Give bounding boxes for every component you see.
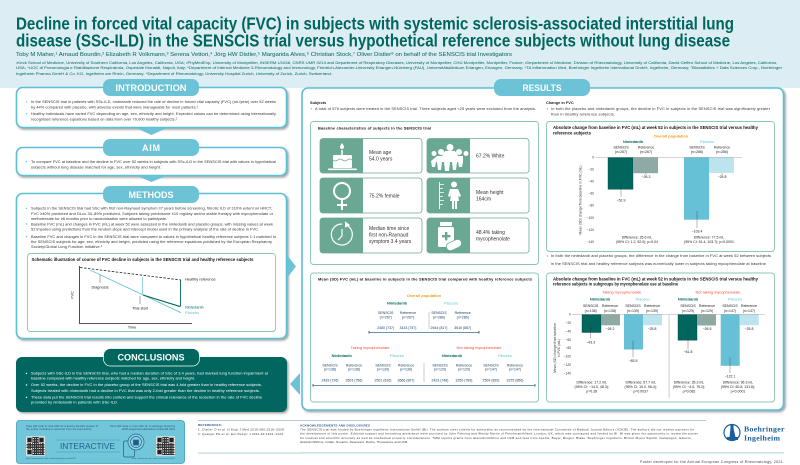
- bar chart: mycophenolate subgroups: Not taking mycophenolate: [696, 290, 740, 294]
- mycophenolate subgroup table: SENSCIS: [375, 363, 391, 367]
- bar chart: mycophenolate subgroups: p<0.0001: [731, 390, 745, 394]
- introduction text: In the SENSCIS trial in patients with SSc-ILD, nintedanib reduced the rate of decline in forced vital capacity (FVC) (mL/year) over 52 weeks: [31, 99, 276, 104]
- bar chart: mycophenolate subgroups: (95% CI: 19.0, 96.4);: [625, 385, 657, 389]
- mean FVC table panel: [310, 273, 538, 402]
- card: median time: [320, 218, 422, 253]
- panel: aim: [16, 139, 286, 176]
- bar chart: mycophenolate subgroups: SENSCIS: [680, 304, 696, 308]
- icon: cake: [328, 143, 357, 170]
- mycophenolate subgroup table: Taking mycophenolate: [351, 345, 389, 350]
- bar chart: mycophenolate subgroups: (95% CI: 60.8, 131.8);: [721, 385, 755, 389]
- results heading: [494, 79, 590, 96]
- methods text: Baseline FVC (mL) and changes in FVC (mL) at week 52 were assessed in the nintedanib and placebo groups, with missing values at week: [31, 221, 273, 226]
- schematic illustration: Placebo: [185, 310, 199, 315]
- bar chart: overall population: Mean (SD) change from baseline in FVC (mL): [578, 166, 582, 234]
- subjects text: Subjects: [310, 100, 326, 105]
- overall population table: Placebo: [444, 300, 458, 305]
- bar chart: mycophenolate subgroups: Reference: [644, 304, 660, 308]
- panel: introduction: [16, 79, 286, 128]
- aim text: [26, 159, 276, 169]
- methods text: Subjects in the SENSCIS trial had SSc with first non-Raynaud symptom ≤7 years before screening, fibrotic ILD of ≥10% extent on HRCT,: [31, 206, 272, 211]
- overall population table: Reference: [400, 311, 416, 315]
- bar chart: mycophenolate subgroups: (n=147): [724, 309, 736, 313]
- bar chart: mycophenolate subgroups: −25.8: [648, 327, 656, 331]
- mycophenolate subgroup table: SENSCIS: [483, 363, 499, 367]
- bar chart: overall population: −20: [588, 168, 594, 172]
- icon: clock: [331, 222, 352, 245]
- icon: female symbol: [334, 183, 350, 210]
- bar chart: overall population: reference subjects: [553, 130, 592, 135]
- subjects text: A total of 576 subjects were treated in the SENSCIS trial. Three subjects aged <25 years were excluded from the analysis.: [315, 106, 536, 111]
- bar chart: overall population: (95% CI: 1.2, 52.0); p=0.04: [616, 240, 658, 244]
- conclusions text: Over 52 weeks, the decline in FVC in the placebo group of the SENSCIS trial was 4-fold greater than in healthy reference subjects.: [31, 382, 262, 387]
- conclusions text: [26, 371, 269, 405]
- mycophenolate subgroup table: SENSCIS: [322, 363, 338, 367]
- bar chart: mycophenolate subgroups: −60: [565, 338, 571, 342]
- mycophenolate subgroup table: Reference: [398, 363, 414, 367]
- affiliations: ¹Keck School of Medicine, University of Southern California, Los Angeles, California, USA; ²PhyMedExp, University of Montpellier, INSERM U1046, CNRS UMR 9214 and Department of Respiratory Diseases, University of Montpellier, CHU Montpellier, Montpellier, France; ³Department of Medicine, Division of Rheumatology, University of California, David Geffen School of Medicine, Los Angeles, California,: [16, 61, 777, 65]
- mycophenolate subgroup table: (n=129): [434, 368, 446, 372]
- mycophenolate subgroup table: 3666 (897): [398, 378, 414, 382]
- card: mean height: [427, 178, 529, 213]
- mycophenolate subgroup table: 2509 (820): [483, 378, 499, 382]
- mycophenolate subgroup table: 3250 (789): [456, 378, 472, 382]
- icon: QR code right: [156, 436, 175, 456]
- mycophenolate subgroup table: Reference: [507, 363, 523, 367]
- bar chart: mycophenolate subgroups: Difference: 17.2 mL: [576, 380, 607, 384]
- schematic illustration: Trial start: [132, 306, 149, 310]
- acknowledgements and disclosures: GlaxoSmithKline, Indalo, Novartis, Respivant, Roche, Theravance and UCB.: [300, 440, 408, 444]
- bar chart: mycophenolate subgroups: (n=138): [604, 309, 616, 313]
- card: mean height: Mean height: [476, 190, 504, 196]
- subgroup text: In both the nintedanib and placebo groups, the difference in the change from baseline in FVC at week 52 between subjects: [551, 253, 771, 258]
- schematic illustration: Schematic illustration of course of FVC decline in subjects in the SENSCIS trial and healthy reference subjects: [32, 257, 254, 262]
- bar chart: mycophenolate subgroups: Taking mycophenolate: [602, 290, 641, 294]
- mycophenolate subgroup table: (n=147): [509, 368, 521, 372]
- bar chart: mycophenolate subgroups: −43.3: [586, 340, 595, 344]
- overall population table: SENSCIS: [378, 311, 394, 315]
- interactive box: [16, 420, 184, 464]
- bar chart: mycophenolate subgroups: −40: [565, 329, 571, 333]
- mycophenolate subgroup table: Reference: [456, 363, 472, 367]
- aim text: subjects without lung disease matched for age, sex, ethnicity and height.: [31, 164, 161, 169]
- bar chart: overall population: −40: [588, 180, 594, 184]
- card: white: 67.2% White: [476, 154, 505, 160]
- bar chart: mycophenolate subgroups: p=0.0037: [633, 390, 648, 394]
- bar chart: overall population: −25.8: [718, 175, 726, 179]
- bar chart: overall population: [546, 122, 774, 252]
- schematic illustration: Nintedanib: [185, 304, 204, 310]
- bar chart: overall population: −120: [587, 228, 594, 232]
- aim heading: [103, 139, 199, 156]
- methods text: Society/Global Lung Function Initiative.³: [31, 244, 103, 249]
- subjects text: [310, 100, 536, 111]
- bar chart: overall population: Reference: [714, 146, 730, 150]
- mean FVC table panel: Mean (SD) FVC (mL) at baseline in subjects in the SENSCIS trial compared with healthy reference subjects: [318, 276, 532, 282]
- bar chart: mycophenolate subgroups: Absolute change from baseline in FVC (mL) at week 52 in subjects in the SENSCIS trial versus healthy: [553, 276, 759, 282]
- conclusions text: provided by nintedanib in patients with SSc-ILD.: [31, 400, 118, 405]
- bar chart: mycophenolate subgroups: −26.5: [703, 327, 711, 331]
- change in FVC text: Change in FVC: [546, 100, 574, 105]
- bar chart: mycophenolate subgroups: −140: [564, 372, 571, 376]
- overall population table: 2544 (817): [431, 326, 447, 330]
- bar chart: overall population: Placebo: [700, 139, 714, 144]
- mycophenolate subgroup table: Nintedanib: [442, 353, 463, 358]
- card: median time: symptom 3.4 years: [369, 239, 412, 245]
- mycophenolate subgroup table: (n=139): [377, 368, 389, 372]
- bar chart: overall population: Overall population: [654, 133, 689, 138]
- logo: Boehringer Ingelheim: Boehringer: [744, 424, 785, 434]
- authors: Toby M Maher,¹ Arnaud Bourdin,² Elizabeth R Volkmann,³ Serena Vettori,⁴ Jörg HW Distler,⁵ Margarida Alves,⁶ Christian Stock,⁷ Oliver Distler⁸ on behalf of the SENSCIS trial Investigators: [16, 52, 512, 58]
- references: REFERENCES:: [198, 423, 222, 427]
- methods text: [26, 206, 276, 249]
- mycophenolate subgroup table: Not taking mycophenolate: [456, 345, 502, 350]
- bar chart: mycophenolate subgroups: SENSCIS: [583, 304, 599, 308]
- overall population table: (n=286): [457, 315, 469, 319]
- bar chart: overall population: (95% CI: 51.4, 103.7); p<0.0001: [684, 240, 734, 244]
- overall population table: (n=267): [402, 315, 414, 319]
- bar chart: mycophenolate subgroups: −25.8: [745, 327, 753, 331]
- logo: Boehringer Ingelheim: [724, 424, 785, 442]
- card: female: 75.2% female: [369, 194, 400, 200]
- bar chart: mycophenolate subgroups: [546, 273, 774, 402]
- card: mycophenolate: mycophenolate: [476, 236, 510, 242]
- card: white: [427, 138, 529, 173]
- bar chart: mycophenolate subgroups: Nintedanib: [590, 297, 611, 302]
- bar chart: mycophenolate subgroups: (n=139): [627, 309, 639, 313]
- arrow: aim to methods: [136, 176, 167, 182]
- acknowledgements and disclosures: for medical and scientific accuracy as well as intellectual property considerations. TMM reports grants from GlaxoSmithKline and UCB and fees from Apellis, Bayer, Biogen, Blade, Boehringer Ingelheim, Bristol-Myers Squibb, Galapagos, Galecto,: [300, 436, 692, 440]
- bar chart: mycophenolate subgroups: Reference: [602, 304, 618, 308]
- mycophenolate subgroup table: 2439 (726): [322, 378, 338, 382]
- overall population table: Reference: [455, 311, 471, 315]
- bar chart: overall population: Difference: 77.5 mL: [694, 236, 724, 240]
- bar chart: mycophenolate subgroups: (n=129): [682, 309, 694, 313]
- bar chart: mycophenolate subgroups: SENSCIS: [625, 304, 641, 308]
- icon: pill bottle: [438, 222, 463, 252]
- arrow: results to conclusions: [290, 373, 300, 395]
- conclusions text: Subjects treated with nintedanib had a decline in FVC that was only 2-fold greater than the decline in healthy reference subjects.: [31, 388, 260, 393]
- overall population table: Nintedanib: [387, 300, 408, 305]
- bar chart: overall population: 0: [592, 156, 594, 160]
- overall population table: SENSCIS: [431, 311, 447, 315]
- introduction text: recognised reference equations based on data from over 70,000 healthy subjects.²: [31, 117, 178, 122]
- bar chart: mycophenolate subgroups: Difference: 35.3 mL: [674, 380, 704, 384]
- bar chart: mycophenolate subgroups: reference subjects in subgroups by mycophenolate use at baseline: [553, 282, 678, 286]
- affiliations: Ingelheim Pharma GmbH & Co. KG, Ingelheim am Rhein, Germany; ⁸Department of Rheumatology, University Hospital Zurich, University of Zurich, Zurich, Switzerland.: [16, 72, 332, 76]
- affiliations: USA; ⁴UOC di Pneumologia e Riabilitazione Respiratoria, Ospedale Monaldi, Napoli, Italy; ⁵Department of Internal Medicine 3-Rheumatology and Immunology, Friedrich-Alexander-University Erlangen-Nürnberg (FAU), Universitätsklinikum Erlangen, Erlangen, Germany; ⁶TA Inflammation Med, Boehringer Ingelheim International GmbH, Ingelheim, Germany; ⁷Biostatistics + Data Sciences Corp., Boehringer: [16, 66, 783, 70]
- methods text: Baseline FVC and changes in FVC in the SENSCIS trial were compared to values in hypothetical healthy reference subjects 1:1 matched to: [31, 234, 276, 239]
- introduction heading: INTRODUCTION: [116, 83, 186, 93]
- bar chart: mycophenolate subgroups: −120: [564, 363, 571, 367]
- mycophenolate subgroup table: SENSCIS: [432, 363, 448, 367]
- card: female: [320, 178, 422, 213]
- baseline characteristics panel: Baseline characteristics of subjects in the SENSCIS trial: [318, 126, 431, 130]
- bar chart: mycophenolate subgroups: Placebo: [636, 297, 650, 302]
- bar chart: mycophenolate subgroups: SENSCIS: [722, 304, 738, 308]
- schematic illustration: FVC: [70, 291, 74, 299]
- bar chart: overall population: (n=286): [716, 150, 728, 154]
- acknowledgements and disclosures: ACKNOWLEDGEMENTS AND DISCLOSURES: [300, 424, 370, 428]
- introduction text: [26, 99, 276, 122]
- subgroup text: [547, 253, 771, 266]
- bar chart: mycophenolate subgroups: p=0.28: [586, 390, 597, 394]
- panel: methods: [16, 186, 286, 338]
- bar chart: overall population: SENSCIS: [613, 146, 629, 150]
- bar chart: mycophenolate subgroups: Reference: [699, 304, 715, 308]
- card: median time: first non-Raynaud: [369, 232, 409, 238]
- interactive box: INTERACTIVE: [60, 441, 115, 451]
- interactive box: the poster including a voiceover from the lead author.: [26, 427, 92, 431]
- interactive box: http://www.poster-link.com/eular2021: [132, 457, 176, 460]
- bar chart: overall population: −26.3: [642, 175, 650, 179]
- conclusions heading: CONCLUSIONS: [118, 352, 184, 362]
- bar chart: mycophenolate subgroups: p=0.082: [683, 390, 695, 394]
- footer note: Poster developed for the Annual European Congress of Rheumatology, 2021.: [640, 460, 784, 464]
- methods text: the SENSCIS subjects for age, sex, ethnicity and height, predicted using the reference equations published by the European Respiratory: [31, 239, 272, 244]
- bar chart: mycophenolate subgroups: Difference: 96.3 mL: [723, 380, 753, 384]
- bar chart: mycophenolate subgroups: Reference: [741, 304, 757, 308]
- title: [16, 13, 734, 51]
- icon: people group: [431, 144, 468, 171]
- bar chart: mycophenolate subgroups: −80: [565, 346, 571, 350]
- introduction text: Healthy individuals have varied FVC depending on age, sex, ethnicity and height. Expected values can be determined using internationally: [31, 111, 276, 116]
- bar chart: mycophenolate subgroups: −61.8: [684, 350, 692, 354]
- overall population table: Overall population: [407, 293, 442, 298]
- aim text: To compare FVC at baseline and the decline in FVC over 52 weeks in subjects with SSc-ILD in the SENSCIS trial with values in hypothetical: [31, 159, 276, 164]
- references: 2. Quanjer PH et al. Eur Respir J 2012;40:1324–1343.: [198, 432, 284, 436]
- methods heading: METHODS: [128, 190, 174, 200]
- icon: phone and touch: [124, 434, 144, 457]
- mycophenolate subgroup table: 3503 (756): [346, 378, 362, 382]
- logo: Boehringer Ingelheim: Ingelheim: [744, 434, 780, 442]
- overall population table: [369, 293, 479, 334]
- bar chart: overall population: −52.9: [617, 198, 625, 202]
- mycophenolate subgroup table: 2423 (748): [432, 378, 448, 382]
- bar chart: mycophenolate subgroups: (n=129): [701, 309, 713, 313]
- references: 1. Distler O et al. N Engl J Med 2019;380:2518–2528.: [198, 428, 285, 432]
- change in FVC text: [546, 100, 771, 116]
- mycophenolate subgroup table: (n=138): [324, 368, 336, 372]
- references: [198, 420, 300, 454]
- introduction heading: [103, 79, 199, 96]
- bar chart: mycophenolate subgroups: −122.1: [725, 374, 735, 378]
- mycophenolate subgroup table: [313, 345, 535, 387]
- bar chart: overall population: Absolute change from baseline in FVC (mL) at week 52 in subjects in the SENSCIS trial versus healthy: [553, 125, 759, 130]
- schematic illustration: Diagnosis: [91, 284, 109, 290]
- overall population table: (n=267): [380, 315, 392, 319]
- conclusions text: Subjects with SSc-ILD in the SENSCIS trial, who had a median duration of SSc of 3.4 years, had marked lung function impairment at: [31, 371, 269, 376]
- mycophenolate subgroup table: Placebo: [390, 353, 404, 358]
- bar chart: mycophenolate subgroups: (n=147): [743, 309, 755, 313]
- mycophenolate subgroup table: (n=139): [400, 368, 412, 372]
- bar chart: overall population: −60: [588, 192, 594, 196]
- interactive box: all BI-supported publications at EULAR 2021: [122, 427, 176, 431]
- mycophenolate subgroup table: 3375 (856): [507, 378, 523, 382]
- bar chart: overall population: −80: [588, 204, 594, 208]
- baseline characteristics panel: [310, 122, 538, 264]
- mycophenolate subgroup table: Reference: [346, 363, 362, 367]
- mycophenolate subgroup table: 2501 (816): [375, 378, 391, 382]
- bar chart: mycophenolate subgroups: Placebo: [728, 297, 742, 302]
- bar chart: overall population: Difference: 26.6 mL: [622, 236, 652, 240]
- bar chart: mycophenolate subgroups: in FVC (mL): [557, 339, 561, 357]
- change in FVC text: In both the placebo and nintedanib groups, the decline in FVC in subjects in the SENSCIS trial was significantly greater: [551, 106, 771, 111]
- mycophenolate subgroup table: (n=147): [485, 368, 497, 372]
- interactive box: Scan QR code or visit URL for a device-friendly version of: [26, 424, 98, 428]
- bar chart: overall population: (n=267): [640, 150, 652, 154]
- bar chart: overall population: SENSCIS: [689, 146, 705, 150]
- subgroup text: in the SENSCIS trial and healthy reference subjects was numerically lower in subjects taking mycophenolate at baseline.: [551, 261, 767, 266]
- bar chart: mycophenolate subgroups: −83.5: [629, 359, 637, 363]
- bar chart: mycophenolate subgroups: −100: [564, 355, 571, 359]
- arrow: methods to results: [287, 255, 296, 278]
- card: mean age: Mean age: [369, 150, 391, 156]
- bar chart: mycophenolate subgroups: −20: [565, 321, 571, 325]
- bar chart: overall population: −140: [587, 240, 594, 244]
- icon: ruler and person: [439, 182, 461, 209]
- card: mycophenolate: 48.4% taking: [476, 230, 505, 236]
- schematic illustration: Time: [128, 324, 136, 330]
- overall population table: 3516 (887): [454, 326, 471, 330]
- methods heading: [103, 186, 199, 203]
- affiliations: [16, 61, 783, 76]
- bar chart: overall population: −103.4: [692, 230, 702, 234]
- panel: conclusions: [16, 348, 287, 412]
- bar chart: mycophenolate subgroups: (n=138): [585, 309, 597, 313]
- introduction text: by 44% compared with placebo, with adverse events that were manageable for most patients.¹: [31, 105, 199, 110]
- bar chart: overall population: −100: [587, 216, 594, 220]
- interactive box: http://www.poster-link.com/interactive-eular2021: [26, 457, 77, 460]
- mycophenolate subgroup table: (n=129): [458, 368, 470, 372]
- bar chart: mycophenolate subgroups: (95% CI: −4.6, 75.2);: [673, 385, 705, 389]
- methods text: FVC ≥40% predicted and DLco 30–89% predicted. Subjects taking prednisone ≤10 mg/day and/or stable therapy with mycophenolate or: [31, 211, 274, 216]
- conclusions heading: [104, 348, 200, 366]
- overall population table: 3433 (787): [400, 326, 416, 330]
- bar chart: overall population: (n=286): [691, 150, 703, 154]
- bar chart: mycophenolate subgroups: Nintedanib: [678, 297, 699, 302]
- overall population table: 2460 (737): [377, 326, 394, 330]
- card: median time: Median time since: [369, 226, 410, 232]
- mycophenolate subgroup table: (n=138): [348, 368, 360, 372]
- mycophenolate subgroup table: Placebo: [498, 353, 512, 358]
- acknowledgements and disclosures: The SENSCIS trial was funded by Boehringer Ingelheim International GmbH (BI). The authors meet criteria for authorship as recommended by the International Committee of Medical Journal Editors (ICMJE). The authors did not receive payment for: [300, 428, 694, 432]
- bar chart: overall population: Nintedanib: [623, 139, 644, 144]
- card: mean age: 54.0 years: [369, 156, 393, 162]
- bar chart: mycophenolate subgroups: (n=139): [646, 309, 658, 313]
- arrow: introduction to aim: [136, 128, 167, 135]
- aim heading: AIM: [142, 143, 160, 153]
- acknowledgements and disclosures: the development of this poster. Editorial support and formatting assistance were provided by Julie Fleming and Wendy Morris of FleishmanHillard, London, UK, which was contracted and funded by BI. BI was given the opportunity to review the poster: [300, 432, 698, 436]
- methods text: 52 imputed using predictions from the random slope and intercept model used in the primary analysis of the rate of decline in FVC.: [31, 226, 259, 231]
- card: mycophenolate: [427, 218, 529, 253]
- card: mean age: [320, 138, 422, 173]
- bar chart: overall population: (n=267): [615, 150, 627, 154]
- bar chart: mycophenolate subgroups: (95% CI: −14.0, 48.3);: [575, 385, 609, 389]
- panel: results: [302, 79, 784, 410]
- mycophenolate subgroup table: Nintedanib: [332, 353, 352, 358]
- bar chart: mycophenolate subgroups: Mean (SD) change from baseline: [553, 323, 557, 373]
- bar chart: overall population: Reference: [638, 146, 654, 150]
- card: mean height: 164cm: [476, 196, 491, 202]
- bar chart: mycophenolate subgroups: Difference: 57.7 mL: [625, 380, 656, 384]
- conclusions text: These data put the SENSCIS trial results into context and support the clinical relevance of the reduction in the rate of FVC decline: [31, 395, 262, 400]
- methods text: methotrexate for ≥6 months prior to randomisation were allowed to participate.: [31, 216, 167, 221]
- overall population table: (n=286): [433, 315, 445, 319]
- schematic illustration: [28, 254, 276, 332]
- results heading: RESULTS: [522, 83, 562, 93]
- bar chart: mycophenolate subgroups: 0: [569, 312, 571, 316]
- bar chart: mycophenolate subgroups: −26.2: [606, 327, 614, 331]
- change in FVC text: than in healthy reference subjects.: [551, 111, 615, 116]
- icon: QR code left: [26, 436, 45, 456]
- conclusions text: baseline compared with healthy reference subjects matched for age, sex, ethnicity and height.: [31, 376, 195, 381]
- interactive box: Scan QR code or visit URL for a webpage featuring: [110, 424, 176, 428]
- acknowledgements and disclosures: [300, 420, 784, 453]
- schematic illustration: Healthy reference: [185, 276, 216, 282]
